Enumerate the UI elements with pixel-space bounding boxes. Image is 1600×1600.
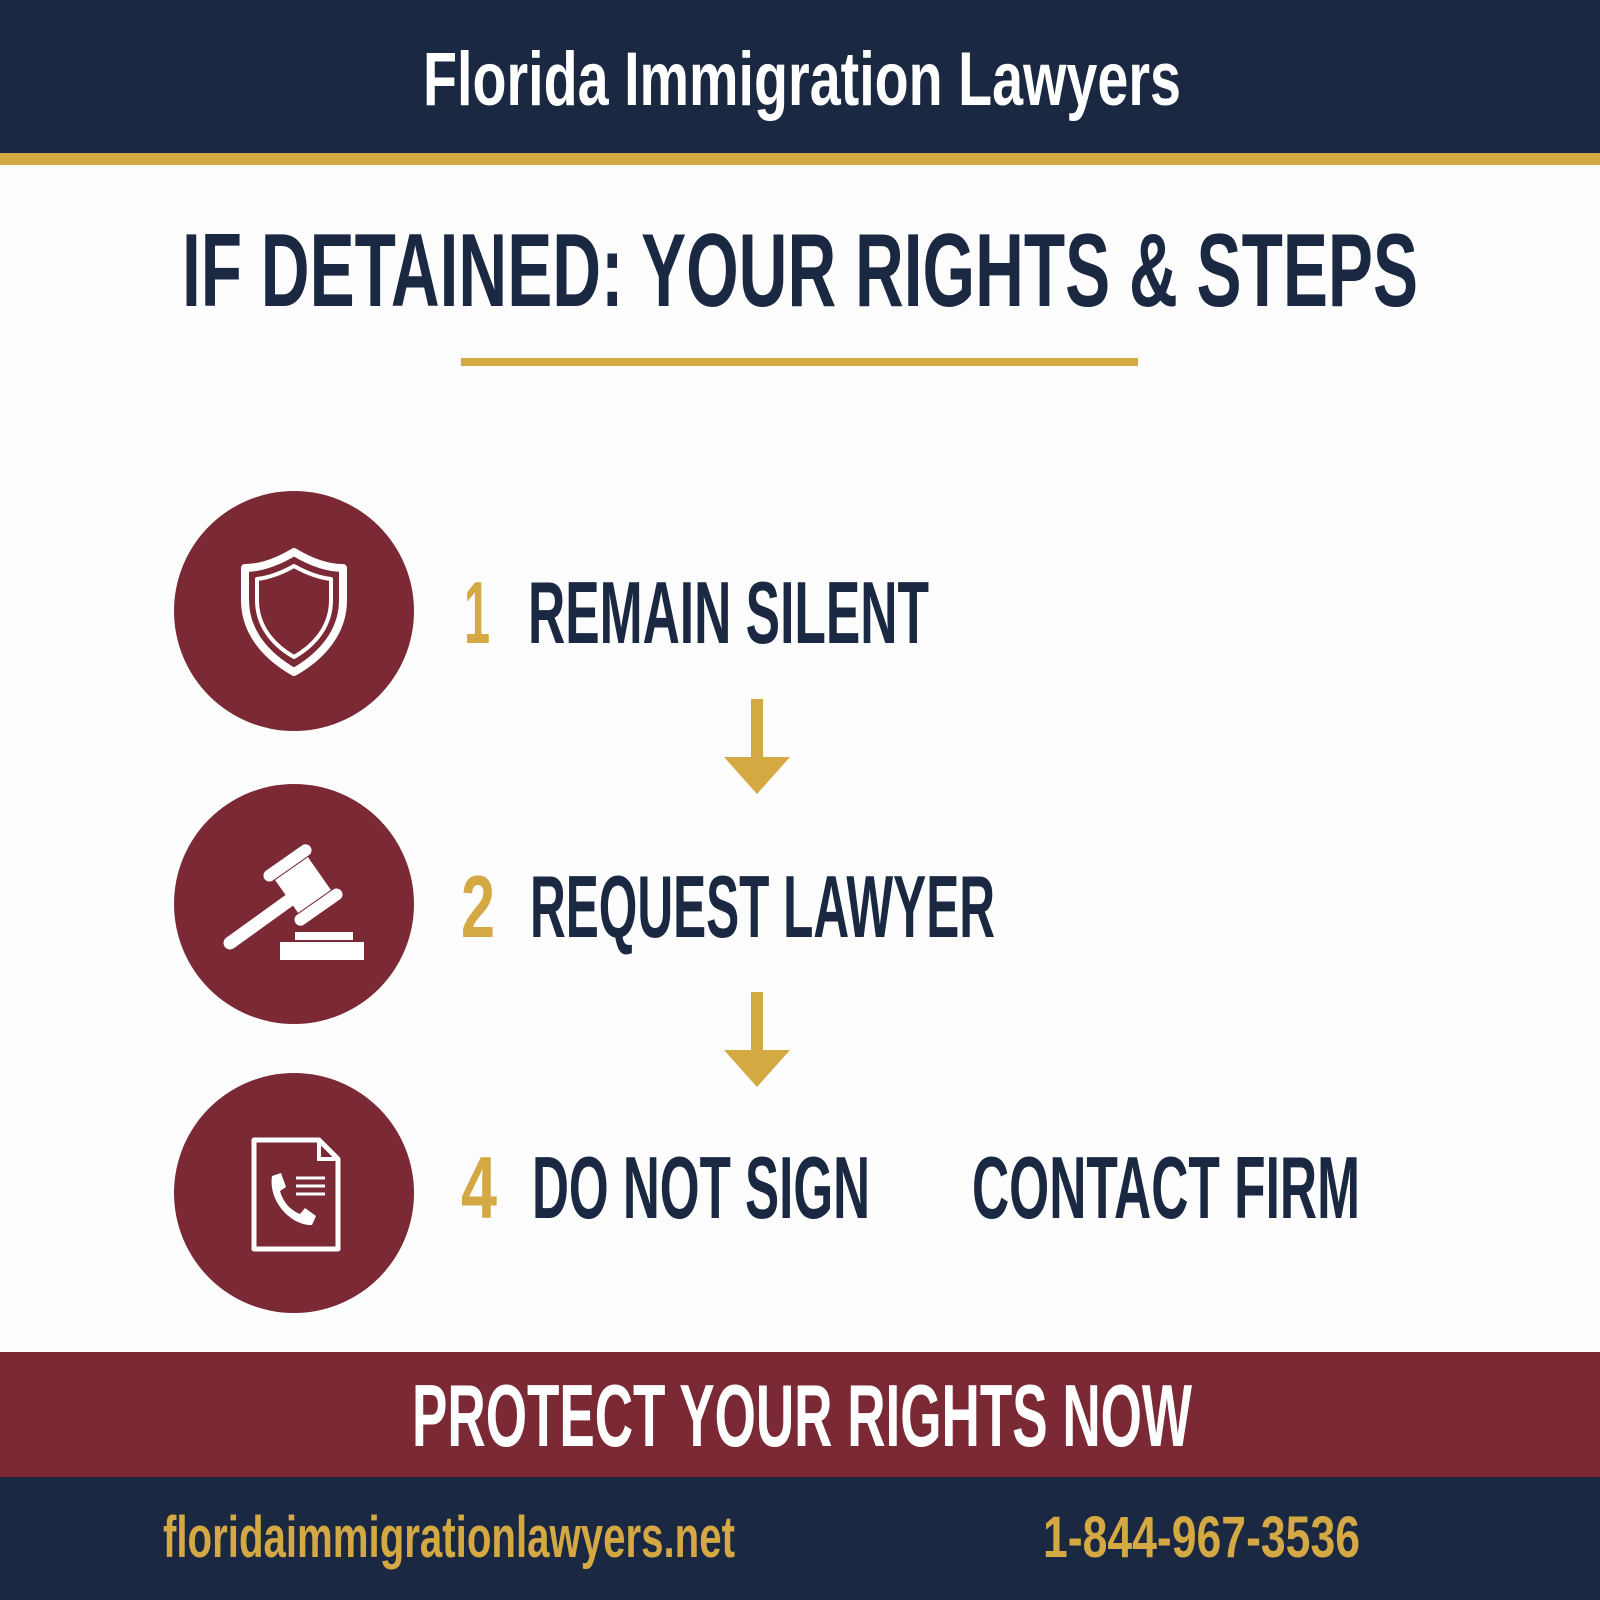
header title: Florida Immigration Lawyers [423,37,1181,122]
call to action band [0,1352,1600,1477]
step 1 [174,491,929,731]
step 1 label: REMAIN SILENT [528,563,929,662]
footer [0,1477,1600,1600]
title underline [461,358,1138,366]
phone: 1-844-967-3536 [1043,1505,1360,1570]
step 3 [174,1073,1360,1313]
step 3 number: 4 [461,1138,497,1237]
step 2 [174,784,995,1024]
step 2 number: 2 [461,857,495,956]
header bar [0,0,1600,165]
arrow 2 [724,992,790,1087]
arrow 1 [724,699,790,794]
icon: shield [174,491,414,731]
step 2 label: REQUEST LAWYER [530,857,995,956]
icon: gavel [174,784,414,1024]
icon: document with phone [174,1073,414,1313]
step 3 label: DO NOT SIGN [532,1138,870,1237]
step 1 number: 1 [464,563,490,662]
website: floridaimmigrationlawyers.net [163,1505,735,1570]
